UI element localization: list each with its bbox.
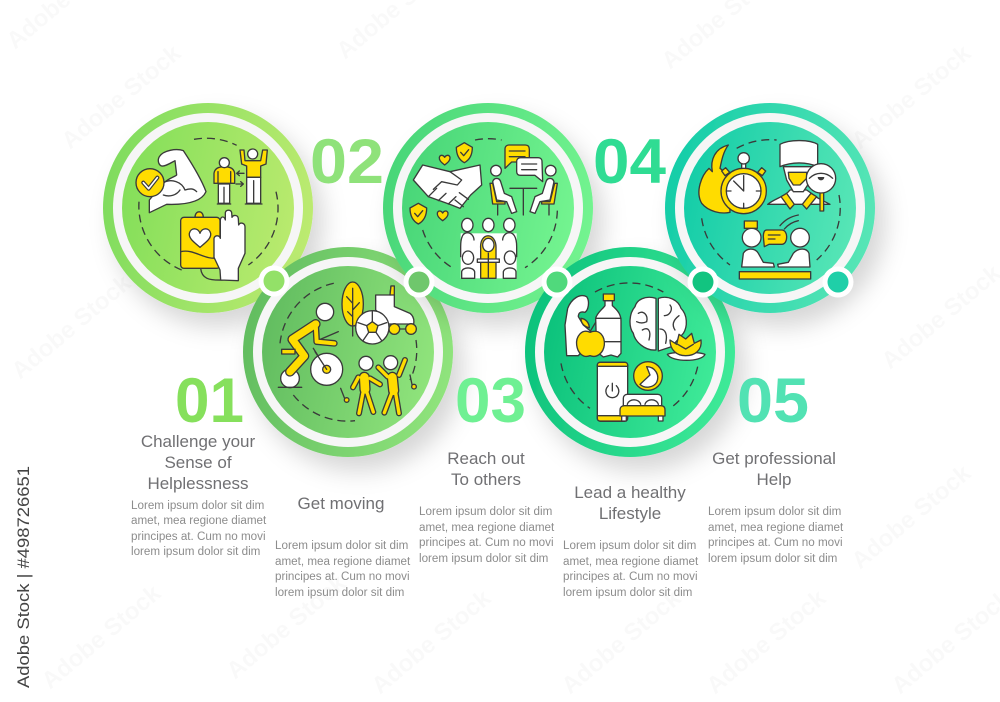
icon: bed bbox=[620, 394, 665, 421]
connector dot 2 bbox=[404, 266, 434, 298]
faint stock watermark: Adobe Stock bbox=[57, 39, 187, 155]
heading: challenge: Sense of bbox=[164, 453, 232, 472]
icon: shields bbox=[410, 143, 472, 224]
icon: roller skate bbox=[376, 286, 416, 334]
heading: professional help: Help bbox=[757, 470, 791, 489]
icon: group support bbox=[461, 218, 517, 278]
faint stock watermark: Adobe Stock bbox=[37, 579, 167, 695]
number 01: 01 bbox=[175, 366, 244, 436]
icon: seated conversation bbox=[490, 165, 557, 215]
text block 2: amet, mea regione diamet bbox=[275, 555, 411, 568]
text block 1: principes at. Cum no movi bbox=[131, 530, 266, 543]
text block 1: lorem ipsum dolor sit dim bbox=[131, 545, 260, 558]
icons: circle 5 bbox=[699, 140, 840, 279]
text block 2: principes at. Cum no movi bbox=[275, 570, 410, 583]
icon: arrows bbox=[236, 171, 244, 186]
icon: hearts bbox=[437, 155, 450, 221]
text block 1: amet, mea regione diamet bbox=[131, 514, 267, 527]
heading: challenge: Helplessness bbox=[147, 474, 249, 493]
text block 5: lorem ipsum dolor sit dim bbox=[708, 552, 837, 565]
icon: apple bbox=[577, 318, 604, 356]
heading: healthy lifestyle: Lead a healthy bbox=[574, 483, 686, 502]
faint stock watermark: Adobe Stock bbox=[847, 459, 977, 575]
icon: strong arm bbox=[565, 296, 595, 356]
number 05: 05 bbox=[737, 366, 809, 436]
heading: reach out: Reach out bbox=[447, 449, 525, 468]
text block 5: amet, mea regione diamet bbox=[708, 521, 844, 534]
text block 3: principes at. Cum no movi bbox=[419, 536, 554, 549]
number 02: 02 bbox=[310, 127, 384, 197]
panel: circle 4 bbox=[525, 247, 735, 457]
text block 4: principes at. Cum no movi bbox=[563, 570, 698, 583]
panel: circle 2 bbox=[243, 247, 453, 457]
faint stock watermark: Adobe Stock bbox=[7, 269, 137, 385]
icon: consultation bbox=[739, 215, 811, 279]
panel: circle 3 bbox=[383, 103, 593, 313]
text block 4: lorem ipsum dolor sit dim bbox=[563, 586, 692, 599]
icon: dancers bbox=[341, 356, 416, 413]
icon: brain bbox=[630, 297, 686, 351]
icon: cheering person bbox=[240, 149, 267, 204]
icon: chat bubbles bbox=[505, 145, 543, 182]
icon: flame bbox=[699, 145, 730, 213]
text block 2: Lorem ipsum dolor sit dim bbox=[275, 539, 408, 552]
icon: slumped person bbox=[214, 158, 235, 204]
stock id caption: Adobe Stock | #498726651 bbox=[14, 466, 33, 688]
heading: reach out: To others bbox=[451, 470, 521, 489]
icon: handshake bbox=[413, 165, 482, 208]
icons: circle 1 bbox=[136, 138, 278, 281]
text block 3: Lorem ipsum dolor sit dim bbox=[419, 505, 552, 518]
faint stock watermark: Adobe Stock bbox=[702, 584, 832, 700]
text block 5: principes at. Cum no movi bbox=[708, 536, 843, 549]
heading: challenge: Challenge your bbox=[141, 432, 256, 451]
text block 5: Lorem ipsum dolor sit dim bbox=[708, 505, 841, 518]
icon: lotus bbox=[667, 333, 705, 360]
icon: raised hand bbox=[214, 210, 245, 281]
connector dot 4 bbox=[688, 266, 718, 298]
icon: clock bbox=[634, 362, 662, 390]
icons: circle 3 bbox=[410, 139, 557, 278]
connector dot 3 bbox=[542, 266, 572, 298]
text block 3: amet, mea regione diamet bbox=[419, 521, 555, 534]
faint stock watermark: Adobe Stock bbox=[847, 39, 977, 155]
icons: circle 2 bbox=[275, 280, 417, 421]
number 03: 03 bbox=[455, 366, 526, 436]
text block 1: Lorem ipsum dolor sit dim bbox=[131, 499, 264, 512]
text block 4: Lorem ipsum dolor sit dim bbox=[563, 539, 696, 552]
number 04: 04 bbox=[593, 127, 666, 197]
text block 2: lorem ipsum dolor sit dim bbox=[275, 586, 404, 599]
faint stock watermark: Adobe Stock bbox=[222, 569, 352, 685]
icon: blood bag bbox=[181, 212, 223, 280]
text block 3: lorem ipsum dolor sit dim bbox=[419, 552, 548, 565]
heading: healthy lifestyle: Lifestyle bbox=[599, 504, 661, 523]
heading: get moving: Get moving bbox=[298, 494, 384, 513]
icon: football bbox=[275, 280, 389, 344]
icon: phone bbox=[597, 362, 628, 421]
icon: stopwatch bbox=[721, 153, 766, 214]
icon: magnifier eye bbox=[806, 164, 836, 211]
icons: circle 4 bbox=[561, 283, 705, 421]
connector dot 5 bbox=[822, 266, 854, 298]
icon: flexed arm bbox=[149, 150, 206, 213]
text block 4: amet, mea regione diamet bbox=[563, 555, 699, 568]
connector dot 1 bbox=[258, 266, 290, 296]
icon: cyclist bbox=[278, 303, 343, 388]
heading: professional help: Get professional bbox=[712, 449, 836, 468]
faint stock watermark: Adobe Stock bbox=[557, 584, 687, 700]
icon: water bottle bbox=[596, 294, 621, 357]
icon: doctor bbox=[768, 141, 830, 209]
icon: tree bbox=[342, 282, 363, 336]
icon: check badge bbox=[136, 169, 164, 197]
faint stock watermark: Adobe Stock bbox=[367, 584, 497, 700]
panel: circle 5 bbox=[665, 103, 875, 313]
panel: circle 1 bbox=[103, 103, 313, 313]
